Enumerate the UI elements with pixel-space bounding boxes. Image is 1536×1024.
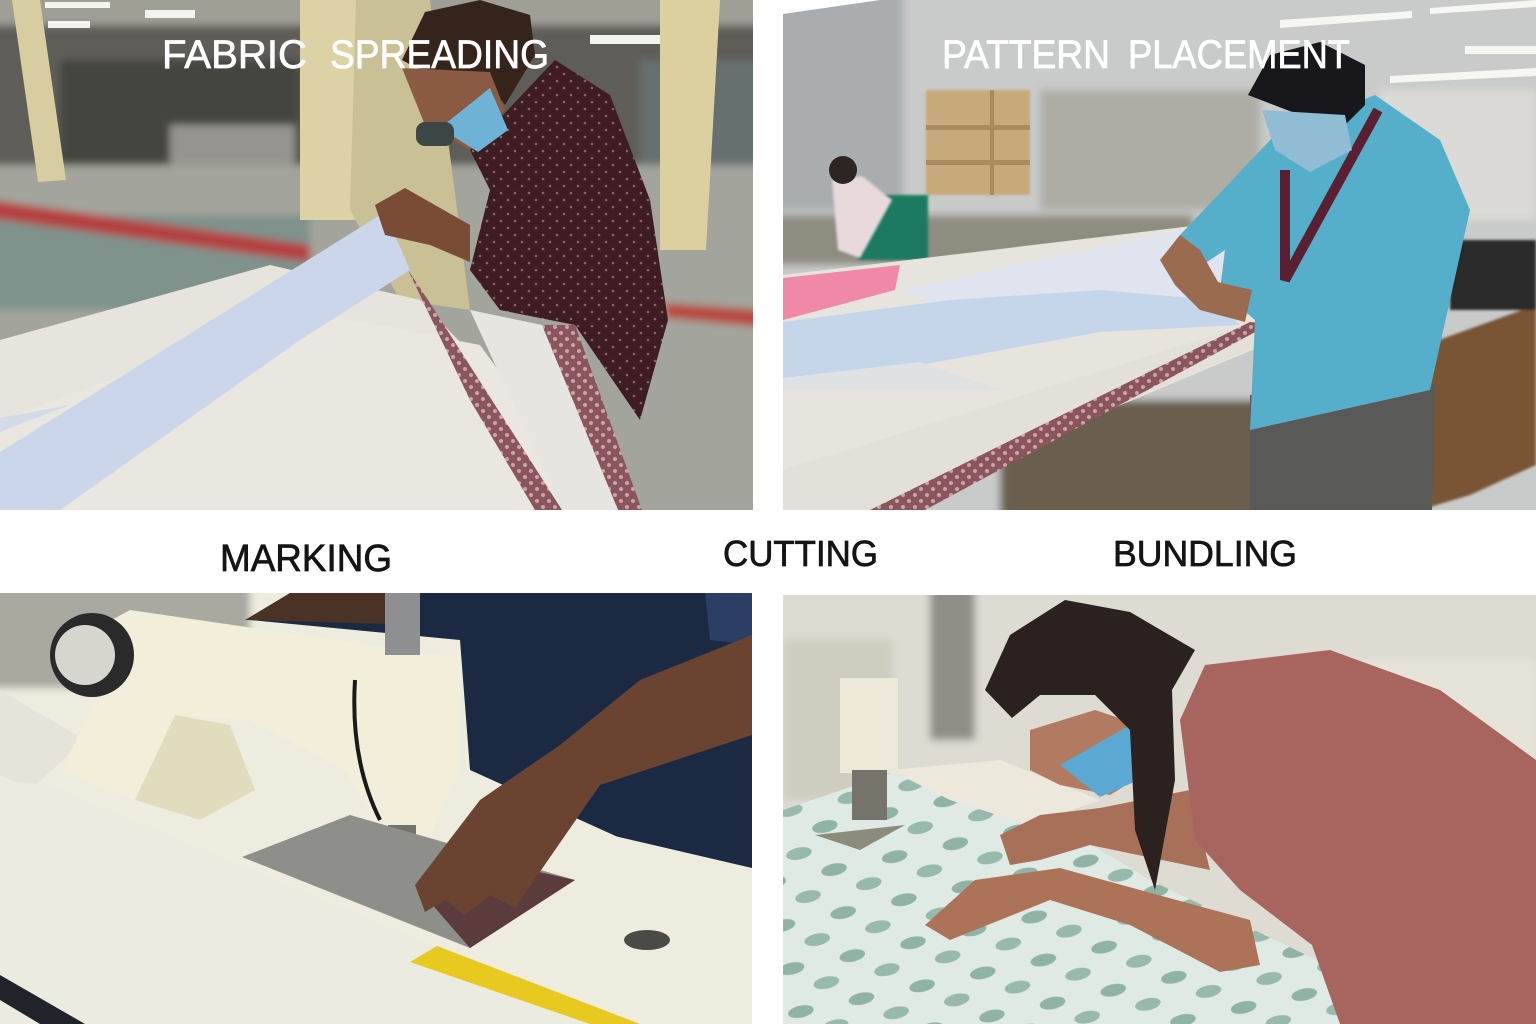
- arm and hand: [415, 635, 752, 915]
- crates and machinery: [1420, 240, 1536, 510]
- person: worker placing pattern: [1160, 42, 1470, 510]
- heading: marking: MARKING: [220, 538, 392, 580]
- cardboard boxes: [926, 90, 1030, 195]
- green chair: [858, 195, 928, 260]
- ceiling lights: [45, 2, 660, 44]
- panel: bundling photo: [773, 585, 1536, 1024]
- heading: pattern placement: [942, 33, 1350, 77]
- table grommet: [624, 930, 670, 950]
- person: worker checking fabric: [925, 600, 1536, 1024]
- panel: fabric spreading photo: [0, 0, 763, 520]
- small machine: [815, 678, 905, 850]
- scissor handle: [0, 975, 85, 1024]
- heading: bundling: BUNDLING: [1113, 533, 1297, 574]
- yellow measuring tape: [410, 946, 640, 1024]
- heading: pattern placement: PATTERN: [942, 33, 1110, 77]
- panel: pattern placement photo: [773, 0, 1536, 520]
- heading: fabric spreading: FABRIC: [162, 33, 307, 77]
- white corner of band: [753, 0, 880, 18]
- heading: fabric spreading: SPREADING: [330, 33, 549, 77]
- panel: marking photo with sewing machine: [0, 583, 762, 1024]
- background worker: [829, 156, 892, 258]
- person: worker spreading fabric: [375, 0, 668, 420]
- metal plate: [242, 815, 575, 948]
- heading: fabric spreading: [162, 33, 549, 77]
- maroon fabric piece: [415, 870, 575, 948]
- ceiling lights: [1280, 0, 1536, 83]
- heading: cutting: CUTTING: [723, 533, 878, 574]
- heading: pattern placement: PLACEMENT: [1128, 33, 1350, 77]
- sewing machine: [50, 593, 420, 834]
